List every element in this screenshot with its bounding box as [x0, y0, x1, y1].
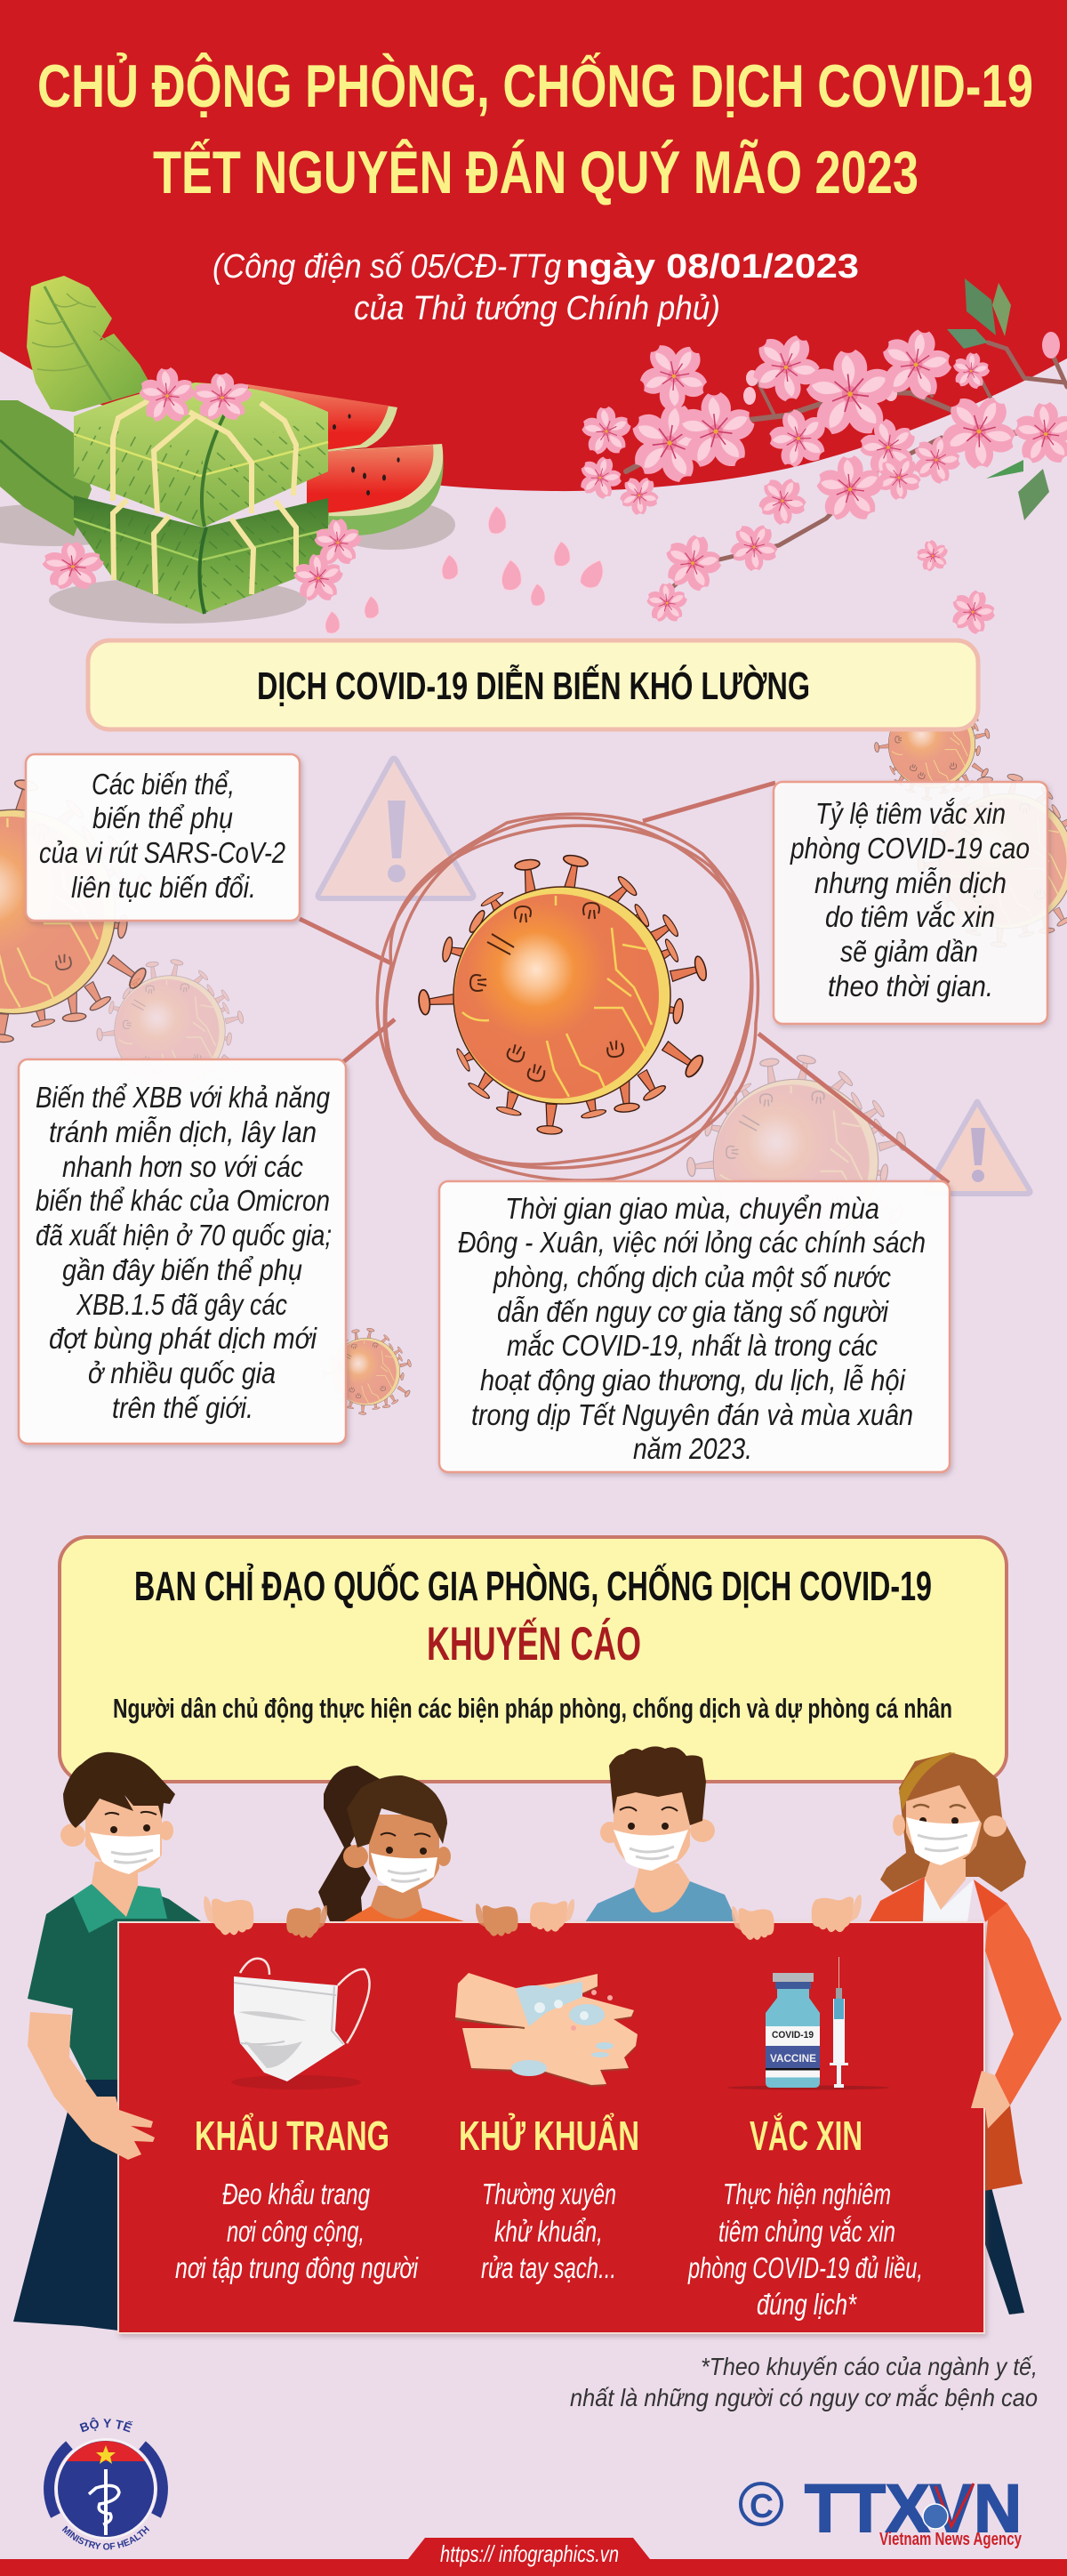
item: vaccine guidance: Thực hiện nghiêm: [723, 2178, 891, 2210]
callout: XBB variant: XBB.1.5 đã gây các: [76, 1288, 287, 1321]
callout: XBB variant: tránh miễn dịch, lây lan: [49, 1115, 317, 1148]
callout: seasonal transition and Tet travel: phòng, chống dịch của một số nước: [493, 1260, 891, 1293]
section heading: covid hard to predict: DỊCH COVID-19 DIỄN BIẾN KHÓ LƯỜNG: [257, 664, 810, 708]
logo: TTXVN: TTXVN: [805, 2471, 1022, 2547]
red recommendation banner: [118, 1922, 984, 2333]
hands holding banner: [204, 1895, 862, 1940]
callout: seasonal transition and Tet travel: hoạt động giao thương, du lịch, lễ hội: [480, 1364, 906, 1397]
subtitle: ngày 08/01/2023: [566, 248, 859, 286]
item: vaccine guidance: tiêm chủng vắc xin: [718, 2215, 895, 2248]
illustration: peach blossom branch: [571, 278, 1067, 641]
callout: seasonal transition and Tet travel: Thời gian giao mùa, chuyển mùa: [505, 1192, 879, 1225]
callout: seasonal transition and Tet travel: Đông - Xuân, việc nới lỏng các chính sách: [458, 1226, 926, 1259]
item: vaccine guidance: [687, 2113, 923, 2321]
icon: washing hands: [455, 1973, 638, 2087]
subtitle: [213, 248, 859, 327]
callout: variants mutate: Các biến thể,: [92, 768, 235, 801]
item: disinfection guidance: [459, 2113, 639, 2284]
callout: vaccine immunity wanes: Tỷ lệ tiêm vắc xin: [815, 797, 1006, 830]
item: disinfection guidance: KHỬ KHUẨN: [459, 2113, 639, 2159]
title: [37, 52, 1033, 206]
warning triangles: [318, 758, 1031, 1194]
subtitle: của Thủ tướng Chính phủ): [354, 290, 720, 327]
person: man in green shirt: [13, 1752, 201, 2330]
panel: national steering committee recommendation: KHUYẾN CÁO: [427, 1617, 641, 1670]
item: mask guidance: nơi tập trung đông người: [175, 2251, 419, 2284]
callout: seasonal transition and Tet travel: dẫn đến nguy cơ gia tăng số người: [497, 1295, 889, 1328]
callout: vaccine immunity wanes: sẽ giảm dần: [840, 935, 978, 968]
footnote: [570, 2353, 1038, 2411]
orange jacket sleeve and hand: [971, 1904, 1062, 2129]
logo: TTXVN: C: [750, 2488, 774, 2525]
callout: variants mutate: liên tục biến đổi.: [71, 871, 256, 904]
callout: variants mutate: của vi rút SARS-CoV-2: [39, 836, 285, 869]
callout: seasonal transition and Tet travel: mắc COVID-19, nhất là trong các: [507, 1329, 878, 1362]
icon: vaccine vial and syringe: [727, 1957, 889, 2090]
item: disinfection guidance: Thường xuyên: [482, 2178, 616, 2210]
callout: vaccine immunity wanes: nhưng miễn dịch: [814, 866, 1007, 899]
logo: TTXVN: Vietnam News Agency: [879, 2530, 1023, 2549]
item: mask guidance: nơi công cộng,: [227, 2215, 365, 2248]
subtitle: (Công điện số 05/CĐ-TTg: [213, 248, 561, 286]
person: woman with ponytail: [318, 1766, 464, 1921]
callout: vaccine immunity wanes: [774, 782, 1047, 1024]
callout: XBB variant: đợt bùng phát dịch mới: [49, 1322, 317, 1355]
green shirt man arm and hand: [28, 2012, 155, 2160]
callout: XBB variant: đã xuất hiện ở 70 quốc gia;: [36, 1219, 332, 1252]
callout: XBB variant: trên thế giới.: [112, 1391, 253, 1424]
main virus: [418, 853, 709, 1135]
item: mask guidance: Đeo khẩu trang: [222, 2178, 370, 2210]
callout: vaccine immunity wanes: theo thời gian.: [828, 970, 993, 1002]
callout: seasonal transition and Tet travel: [439, 1181, 950, 1472]
icon: face mask: [231, 1959, 370, 2089]
person: woman in orange jacket: [869, 1752, 1026, 2314]
item: mask guidance: KHẨU TRANG: [195, 2113, 389, 2159]
callout: vaccine immunity wanes: phòng COVID-19 cao: [790, 832, 1030, 865]
icon: vaccine vial and syringe: COVID-19: [772, 2030, 814, 2041]
callout: variants mutate: [26, 754, 300, 921]
callout: XBB variant: biến thể khác của Omicron: [36, 1184, 330, 1217]
section heading: covid hard to predict: [88, 640, 978, 729]
callout: seasonal transition and Tet travel: năm 2023.: [633, 1432, 752, 1465]
red header shape: [0, 0, 1067, 491]
callout: XBB variant: Biến thể XBB với khả năng: [36, 1081, 331, 1114]
callout: XBB variant: [19, 1059, 346, 1444]
item: vaccine guidance: đúng lịch*: [757, 2288, 857, 2321]
falling petals: [325, 506, 610, 633]
logo: Ministry of Health: [44, 2418, 168, 2549]
callout: XBB variant: gần đây biến thể phụ: [62, 1253, 302, 1286]
person: man in blue shirt: [585, 1746, 737, 1922]
callout: variants mutate: biến thể phụ: [92, 801, 233, 834]
item: disinfection guidance: khử khuẩn,: [494, 2215, 603, 2248]
callout: XBB variant: ở nhiều quốc gia: [88, 1356, 276, 1389]
footer bar with url: [0, 2538, 1067, 2576]
logo: Ministry of Health: MINISTRY OF HEALTH: [62, 2526, 149, 2549]
logo: Ministry of Health: BỘ Y TẾ: [80, 2418, 133, 2432]
callout: seasonal transition and Tet travel: trong dịp Tết Nguyên đán và mùa xuân: [471, 1398, 913, 1431]
callout: vaccine immunity wanes: do tiêm vắc xin: [825, 900, 995, 933]
item: mask guidance: [175, 2113, 419, 2284]
item: disinfection guidance: rửa tay sạch...: [481, 2251, 616, 2284]
panel: national steering committee recommendation: [60, 1537, 1007, 1782]
icon: vaccine vial and syringe: VACCINE: [770, 2052, 816, 2065]
scribble rings around main virus: [377, 814, 758, 1180]
illustration: banh chung, leaves and watermelon: [0, 276, 455, 624]
item: vaccine guidance: VẮC XIN: [750, 2113, 862, 2159]
footer bar with url: https:// infographics.vn: [440, 2540, 619, 2567]
background viruses: [0, 688, 1067, 1415]
callout: XBB variant: nhanh hơn so với các: [62, 1150, 303, 1183]
item: vaccine guidance: phòng COVID-19 đủ liều,: [687, 2251, 923, 2284]
connector lines: [300, 783, 949, 1183]
